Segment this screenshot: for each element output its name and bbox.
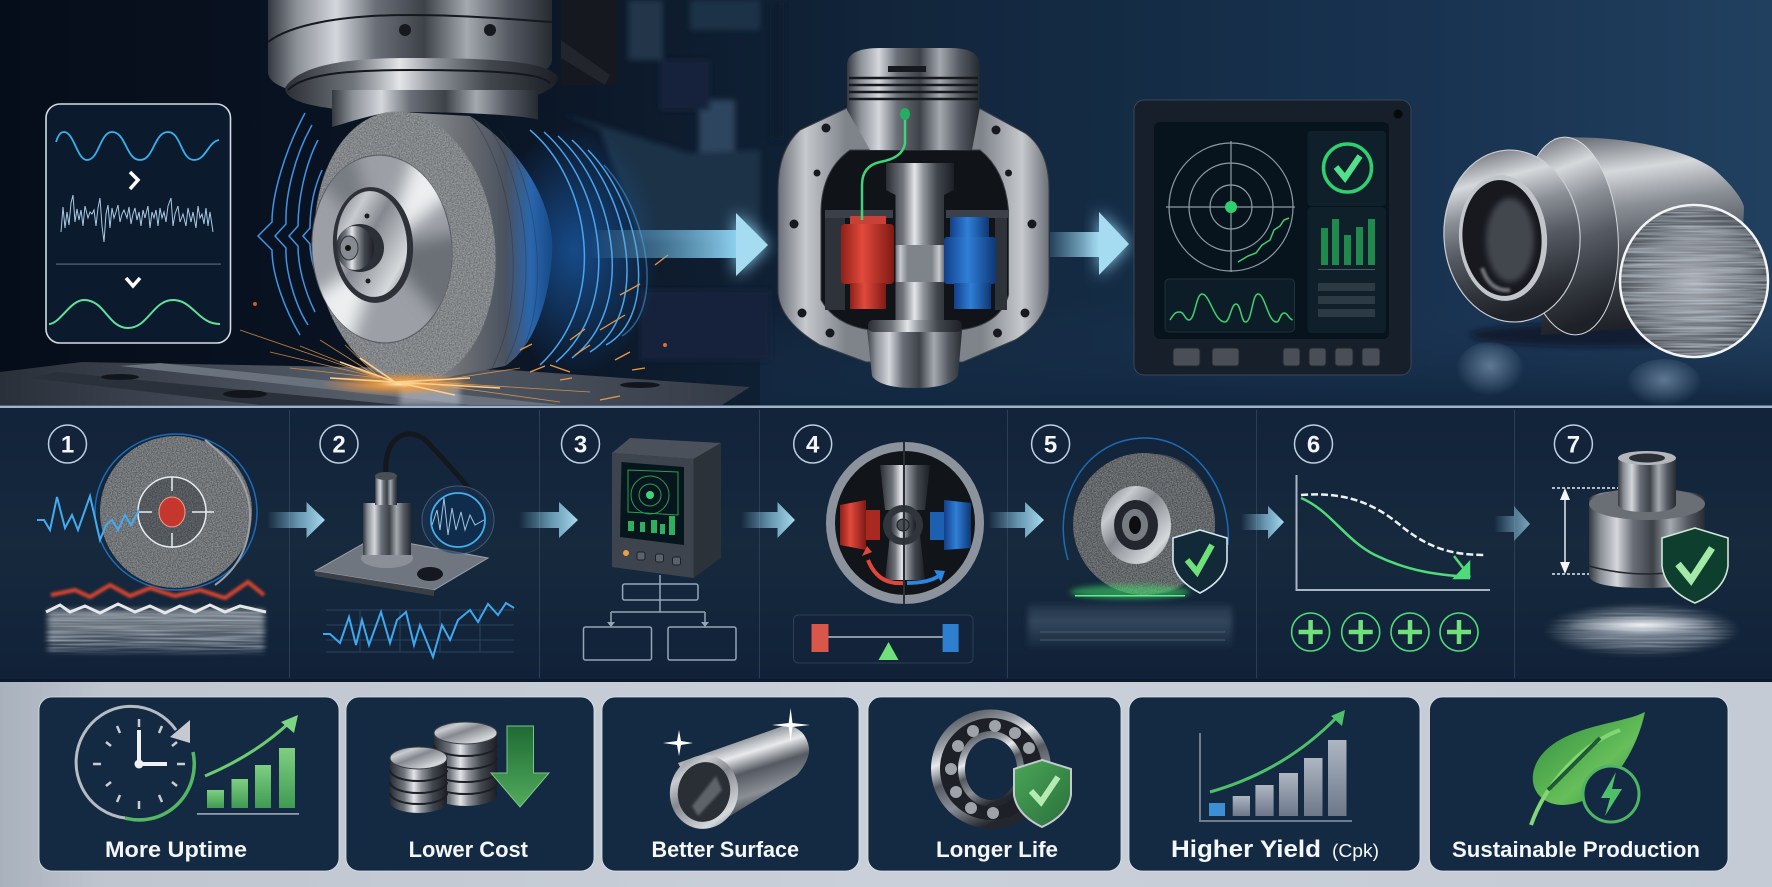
panel: machining hero (0, 0, 1772, 411)
badge 2: 2 (332, 432, 346, 458)
heat line (51, 582, 264, 598)
green smooth wave (49, 300, 220, 328)
panel: benefits row (0, 679, 1772, 887)
abrasive face (301, 102, 509, 392)
badge 1: 1 (61, 432, 74, 458)
status bars (1308, 207, 1386, 333)
card: more uptime (39, 697, 339, 871)
badge 5: 5 (1044, 432, 1057, 458)
card: better surface (602, 697, 859, 871)
arrow 2 (519, 502, 578, 538)
spindle (268, 0, 617, 127)
badge 4: 4 (806, 432, 820, 458)
magnified surface lens (1615, 200, 1772, 362)
dimension marker (1552, 488, 1622, 574)
grinding wheel (311, 111, 552, 381)
shield check (1014, 760, 1071, 827)
plus badges (1292, 613, 1478, 651)
badge 3: 3 (574, 432, 587, 458)
badge 5 (1032, 425, 1070, 463)
dashed baseline curve (1301, 494, 1486, 555)
active balancing cutaway (778, 48, 1049, 388)
cylindrical part (1589, 490, 1705, 588)
down arrow (491, 726, 549, 807)
step 7: quality part (1544, 425, 1740, 656)
centre hub (883, 505, 923, 545)
left coin stack (390, 747, 447, 813)
step 2: sensor (315, 425, 514, 657)
shield check (1173, 530, 1227, 593)
sparks (240, 255, 668, 402)
top threaded neck (847, 48, 980, 150)
rough surface (46, 604, 266, 652)
shaft (886, 163, 954, 320)
green contact glow (1070, 585, 1190, 599)
blue weight (930, 512, 944, 540)
step 4: balancing actuators (794, 425, 984, 663)
balance scale (794, 615, 973, 663)
smooth surface (1028, 605, 1232, 647)
growth bars (197, 715, 299, 815)
arrow 1 (267, 502, 325, 538)
caption: Better Surface (652, 837, 799, 862)
shield check (1662, 528, 1728, 603)
blue actuator (944, 217, 996, 309)
brackets (825, 210, 845, 310)
arrow 5 (1241, 506, 1284, 539)
badge 2 (320, 425, 358, 463)
blue sine wave (56, 132, 219, 160)
sparkles (663, 708, 810, 756)
finished workpiece (1438, 134, 1772, 411)
polished surface (1544, 604, 1740, 656)
arrow 4 (988, 502, 1044, 538)
clock icon (76, 706, 194, 820)
card: longer life (868, 697, 1121, 871)
signal lens (422, 486, 494, 554)
base plate (0, 362, 750, 405)
polished tube (663, 725, 809, 835)
vibration waves right (530, 130, 647, 365)
green reduced curve (1301, 498, 1470, 578)
bearing (931, 710, 1051, 828)
badge 7: 7 (1567, 432, 1580, 458)
hub disc (306, 150, 458, 348)
red weight (840, 500, 866, 550)
arrow: wheel to actuator (590, 213, 768, 276)
control buttons (1173, 348, 1380, 366)
right coin stack (434, 722, 497, 806)
card: higher yield (1129, 697, 1420, 871)
badge 6: 6 (1307, 432, 1320, 458)
signal trace (1165, 279, 1294, 332)
machine background (561, 0, 784, 360)
panel: seven step process (0, 408, 1772, 680)
step 6: trend chart (1292, 425, 1490, 651)
noisy waveform (61, 195, 213, 242)
caption qualifier: (Cpk) (1332, 841, 1379, 861)
rotation arrows (868, 560, 903, 583)
vibration waves left (258, 113, 322, 335)
badge 7 (1554, 425, 1592, 463)
flow diagram (584, 575, 736, 660)
sensor wire (862, 114, 905, 220)
arrow 3 (741, 502, 795, 538)
step 1: imbalance detected (37, 425, 266, 652)
signal graph (323, 603, 514, 657)
monitor (1134, 100, 1411, 375)
chart divider (56, 264, 221, 265)
caption: Higher Yield (1171, 836, 1321, 863)
arrow 6 (1494, 506, 1530, 541)
controller screen (620, 462, 684, 545)
leaf (1531, 712, 1645, 825)
glow behind grinding wheel (490, 125, 660, 375)
radar (1166, 141, 1295, 272)
badge 4 (794, 425, 832, 463)
step 3: controller (562, 425, 736, 660)
arrow: actuator to monitor (1050, 212, 1129, 275)
yield chart (1200, 710, 1352, 821)
housing bolts (790, 124, 1036, 338)
waveform comparison card (46, 104, 230, 343)
badge 6 (1294, 425, 1332, 463)
chevron right (130, 172, 138, 189)
status check (1308, 131, 1386, 206)
cable (386, 434, 488, 510)
caption: Lower Cost (409, 837, 529, 862)
step 5: balanced wheel (1028, 425, 1232, 647)
caption: Longer Life (936, 837, 1058, 862)
red actuator (841, 216, 894, 309)
chevron down (126, 278, 140, 286)
caption: Sustainable Production (1452, 837, 1700, 862)
badge 3 (562, 425, 600, 463)
card: sustainable production (1430, 697, 1728, 871)
badge 1 (48, 425, 86, 463)
caption: More Uptime (105, 837, 247, 862)
card: lower cost (346, 697, 594, 871)
energy cycle badge (1583, 766, 1639, 822)
vibration trace (37, 496, 139, 540)
